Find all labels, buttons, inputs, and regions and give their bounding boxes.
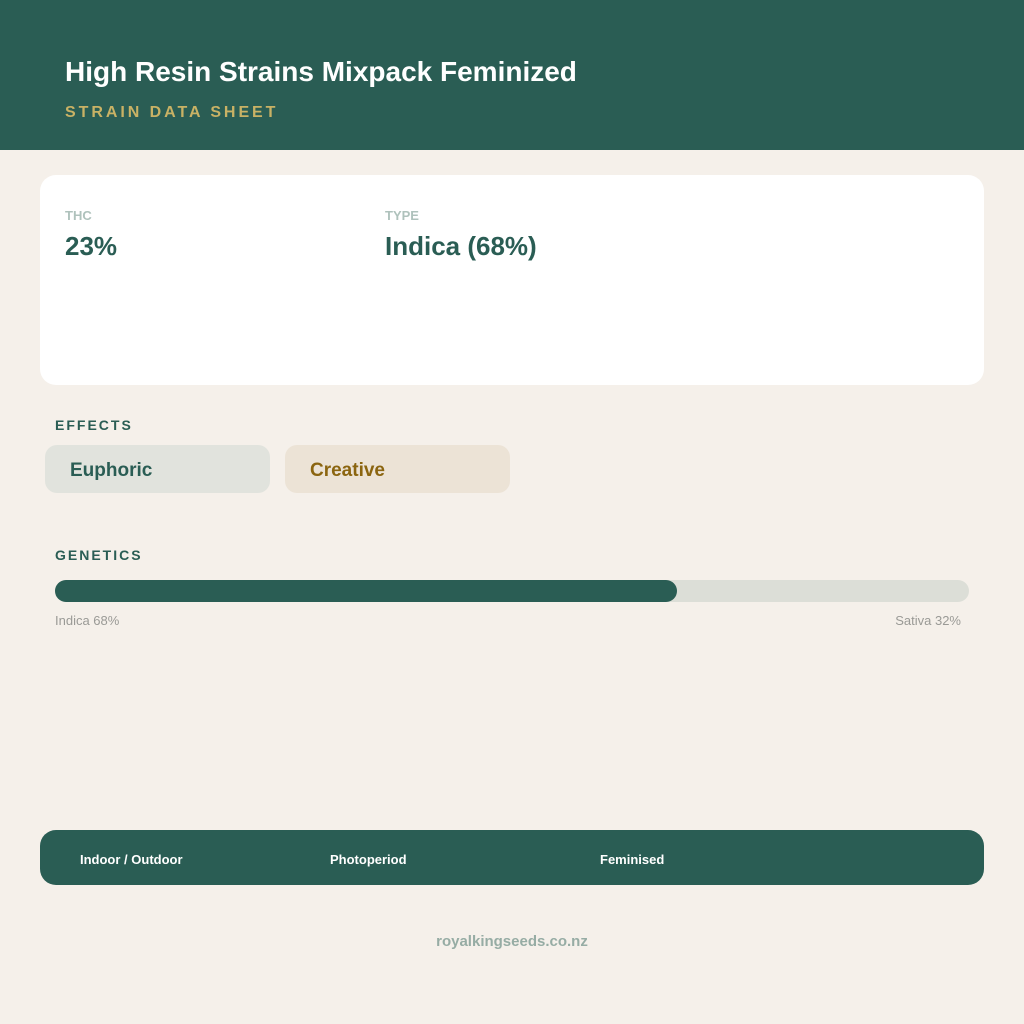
effect tag: Creative: Creative bbox=[310, 460, 385, 481]
genetics heading: GENETICS bbox=[55, 547, 143, 563]
effect tag: Euphoric bbox=[45, 445, 270, 493]
THC value: 23% bbox=[65, 231, 117, 261]
indica label: Indica 68% bbox=[55, 613, 119, 628]
effect tag: Euphoric: Euphoric bbox=[70, 460, 152, 481]
indoor outdoor: Indoor / Outdoor bbox=[80, 852, 183, 867]
genetics bar bbox=[55, 580, 969, 602]
effects heading: EFFECTS bbox=[55, 417, 133, 433]
subtitle: STRAIN DATA SHEET bbox=[65, 104, 278, 121]
panel: growing info bar bbox=[40, 830, 984, 885]
type value: Indica (68%) bbox=[385, 231, 537, 261]
type label: TYPE bbox=[385, 208, 419, 223]
sativa label: Sativa 32% bbox=[895, 613, 961, 628]
panel: stats card bbox=[40, 175, 984, 385]
effect tag: Creative bbox=[285, 445, 510, 493]
header band bbox=[0, 0, 1024, 150]
THC label: THC bbox=[65, 208, 92, 223]
indica fill bbox=[55, 580, 677, 602]
feminised: Feminised bbox=[600, 852, 664, 867]
footer website: royalkingseeds.co.nz bbox=[436, 933, 588, 950]
title: High Resin Strains Mixpack Feminized bbox=[65, 56, 577, 87]
photoperiod: Photoperiod bbox=[330, 852, 407, 867]
